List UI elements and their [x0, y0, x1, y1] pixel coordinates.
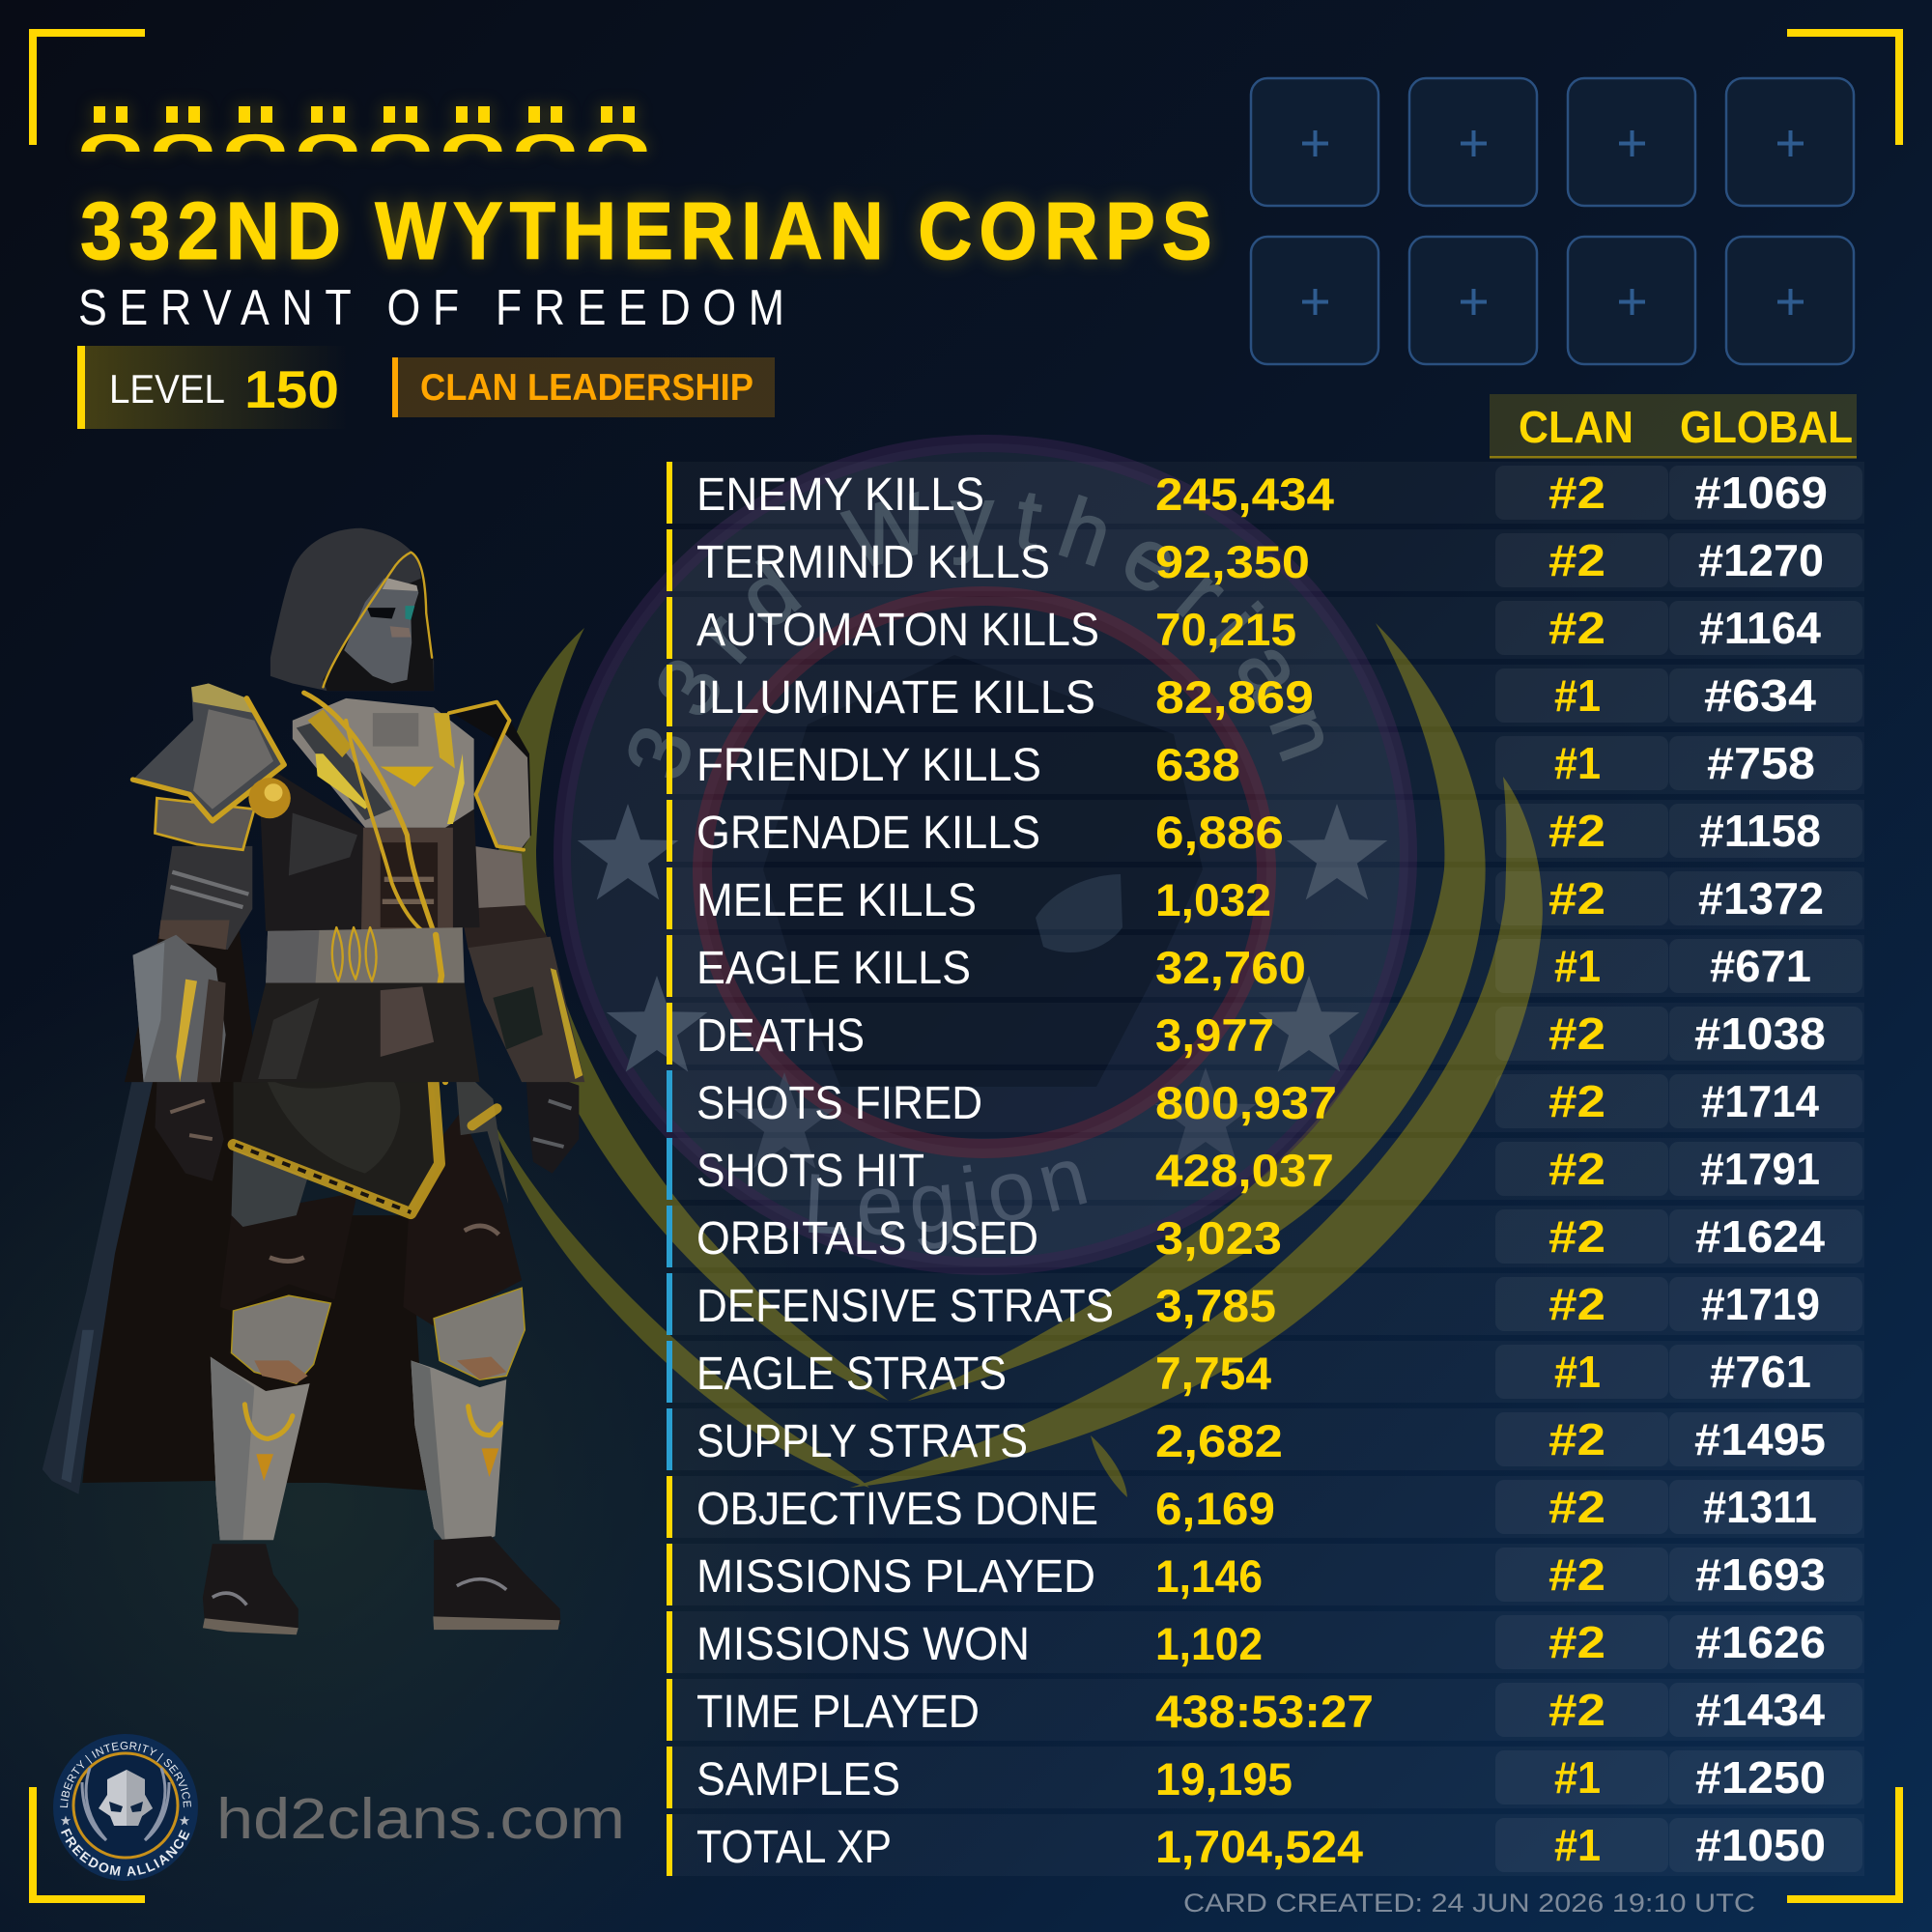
cape	[82, 1063, 426, 1491]
right forearm armor	[469, 937, 584, 1082]
row: defensive strats: 3,785	[1155, 1280, 1276, 1331]
row: missions played: #2	[1548, 1549, 1605, 1600]
right boot	[434, 1536, 560, 1624]
row: orbitals used	[667, 1206, 1864, 1267]
tabard gold trim	[234, 1063, 440, 1213]
row: shots fired: 800,937	[1155, 1077, 1337, 1128]
right thigh	[403, 1112, 522, 1326]
row: objectives done: OBJECTIVES DONE	[696, 1484, 1098, 1535]
chest plate	[293, 698, 474, 828]
row: samples: #1250	[1695, 1752, 1826, 1803]
emblem skull	[99, 1770, 153, 1826]
row: deaths	[667, 1003, 1864, 1065]
chest gold marks	[316, 753, 369, 810]
row: shots hit: #2	[1548, 1144, 1605, 1194]
row: shots hit	[667, 1138, 1864, 1200]
tabard upper	[241, 983, 480, 1082]
row: friendly kills: #1	[1554, 738, 1601, 788]
row: total xp: #1	[1554, 1820, 1601, 1870]
row: friendly kills: FRIENDLY KILLS	[696, 740, 1041, 791]
row: orbitals used: ORBITALS USED	[696, 1213, 1038, 1264]
face mask	[344, 578, 418, 684]
row: shots hit: #1791	[1700, 1144, 1820, 1194]
logo top arc text: 33rd Wytherian	[628, 491, 1323, 779]
row: melee kills: #1372	[1698, 873, 1824, 923]
gold orb	[248, 778, 291, 818]
gold rope	[304, 693, 440, 950]
row: deaths: #2	[1548, 1009, 1605, 1059]
row: friendly kills: #758	[1707, 738, 1815, 788]
row: missions won: #2	[1548, 1617, 1605, 1667]
left thigh	[220, 1192, 357, 1311]
row: supply strats: 2,682	[1155, 1415, 1283, 1466]
row: grenade kills: #1158	[1699, 806, 1821, 856]
row: enemy kills: #2	[1548, 468, 1605, 518]
row: shots fired	[667, 1070, 1864, 1132]
row: eagle strats	[667, 1341, 1864, 1403]
row: deaths: #1038	[1694, 1009, 1826, 1059]
belt	[266, 927, 465, 983]
figure upper body	[125, 528, 584, 1082]
role text: CLAN LEADERSHIP	[420, 367, 753, 409]
row: orbitals used: 3,023	[1155, 1212, 1282, 1264]
logo bottom arc text: Legion	[809, 1161, 1088, 1249]
row: eagle strats: #1	[1554, 1347, 1601, 1397]
row: supply strats	[667, 1408, 1864, 1470]
armored character figure	[43, 528, 584, 1634]
skull eye	[1036, 874, 1122, 952]
emblem bottom text: FREEDOM ALLIANCE	[61, 1828, 189, 1876]
row: deaths: 3,977	[1155, 1009, 1274, 1061]
row: missions played: 1,146	[1155, 1550, 1263, 1602]
row: eagle kills: #671	[1710, 941, 1811, 991]
row: samples: SAMPLES	[696, 1754, 900, 1805]
row: eagle kills: 32,760	[1155, 942, 1306, 993]
medal slots grid	[1251, 78, 1854, 364]
tabard lower	[234, 1063, 440, 1213]
row: melee kills: 1,032	[1155, 874, 1271, 925]
row: supply strats: #1495	[1694, 1414, 1826, 1464]
level badge	[77, 346, 348, 429]
row: missions played: MISSIONS PLAYED	[696, 1551, 1095, 1603]
row: terminid kills: #1270	[1698, 535, 1824, 585]
left boot	[203, 1544, 298, 1628]
left pauldron under plate	[155, 798, 254, 850]
row: friendly kills	[667, 732, 1864, 794]
level number: 150	[244, 359, 339, 419]
row: shots fired: #1714	[1701, 1076, 1819, 1126]
right knee guard	[434, 1288, 525, 1379]
stars	[578, 804, 1387, 1169]
emblem top text: LIBERTY | INTEGRITY | SERVICE	[60, 1742, 191, 1808]
row: defensive strats: #2	[1548, 1279, 1605, 1329]
corner bracket bottom-right	[1787, 1787, 1903, 1903]
left shin emblem	[244, 1405, 293, 1438]
row: automaton kills: #1164	[1699, 603, 1821, 653]
row: automaton kills: 70,215	[1155, 604, 1296, 655]
table header	[1490, 394, 1857, 458]
row: missions won: #1626	[1695, 1617, 1826, 1667]
left shin	[211, 1356, 310, 1540]
row: time played: TIME PLAYED	[696, 1687, 980, 1738]
row: melee kills: #2	[1548, 873, 1605, 923]
row: eagle kills: EAGLE KILLS	[696, 943, 971, 994]
card created timestamp: CARD CREATED: 24 JUN 2026 19:10 UTC	[1183, 1889, 1755, 1918]
row: objectives done: #1311	[1703, 1482, 1817, 1532]
hood	[270, 528, 434, 691]
row: defensive strats	[667, 1273, 1864, 1335]
logo disc with purple ring	[562, 443, 1408, 1266]
stats table	[667, 462, 1864, 1876]
left upper arm	[158, 846, 252, 950]
row: illuminate kills: #634	[1704, 670, 1816, 721]
row: eagle strats: 7,754	[1155, 1348, 1271, 1399]
global column heading: GLOBAL	[1680, 402, 1853, 452]
row: samples: #1	[1554, 1752, 1601, 1803]
row: melee kills: MELEE KILLS	[696, 875, 977, 926]
row: terminid kills: TERMINID KILLS	[696, 537, 1050, 588]
row: terminid kills: 92,350	[1155, 536, 1310, 587]
watermark clan logo	[497, 435, 1543, 1497]
subtitle: SERVANT OF FREEDOM	[78, 280, 784, 336]
row: enemy kills: #1069	[1694, 468, 1828, 518]
row: missions won: 1,102	[1155, 1618, 1263, 1669]
row: deaths: DEATHS	[696, 1010, 865, 1062]
row: shots hit: SHOTS HIT	[696, 1146, 924, 1197]
row: illuminate kills	[667, 665, 1864, 726]
level label: LEVEL	[109, 366, 225, 412]
row: defensive strats: #1719	[1701, 1279, 1820, 1329]
cape upper	[125, 927, 258, 1082]
row: time played	[667, 1679, 1864, 1741]
row: missions won: MISSIONS WON	[696, 1619, 1030, 1670]
row: total xp: TOTAL XP	[696, 1822, 892, 1873]
skull silhouette	[763, 655, 1203, 1087]
figure lower body	[43, 1063, 579, 1634]
row: shots fired: SHOTS FIRED	[696, 1078, 982, 1129]
row: grenade kills: #2	[1548, 806, 1605, 856]
clan tag row	[77, 100, 651, 158]
left forearm armor	[133, 935, 226, 1082]
row: objectives done: #2	[1548, 1482, 1605, 1532]
row: eagle strats: #761	[1710, 1347, 1811, 1397]
row: shots hit: 428,037	[1155, 1145, 1334, 1196]
right shin emblem	[469, 1406, 500, 1435]
row: shots fired: #2	[1548, 1076, 1605, 1126]
row: terminid kills	[667, 529, 1864, 591]
hood gold outline	[323, 553, 432, 687]
clan column heading: CLAN	[1519, 402, 1634, 452]
chest straps	[361, 828, 453, 931]
title: 332ND WYTHERIAN CORPS	[80, 186, 1212, 277]
row: missions won	[667, 1611, 1864, 1673]
row: illuminate kills: #1	[1554, 670, 1601, 721]
torso dark	[258, 761, 480, 931]
row: defensive strats: DEFENSIVE STRATS	[696, 1281, 1114, 1332]
row: time played: #1434	[1695, 1685, 1825, 1735]
row: supply strats: SUPPLY STRATS	[696, 1416, 1028, 1467]
row: melee kills	[667, 867, 1864, 929]
row: time played: #2	[1548, 1685, 1605, 1735]
right shin	[411, 1360, 506, 1551]
row: supply strats: #2	[1548, 1414, 1605, 1464]
right upper arm	[469, 846, 549, 946]
laurel crescents	[488, 623, 1543, 1497]
row: eagle strats: EAGLE STRATS	[696, 1349, 1007, 1400]
row: grenade kills: GRENADE KILLS	[696, 808, 1040, 859]
row: friendly kills: 638	[1155, 739, 1240, 790]
row: enemy kills: 245,434	[1155, 469, 1334, 520]
role badge	[392, 357, 775, 417]
row: illuminate kills: 82,869	[1155, 671, 1314, 723]
row: time played: 438:53:27	[1155, 1686, 1374, 1737]
row: enemy kills: ENEMY KILLS	[696, 469, 984, 521]
clan tag row: ÖÖÖÖÖÖÖÖ	[79, 125, 649, 180]
site name: hd2clans.com	[216, 1787, 625, 1851]
emblem laurel	[82, 1768, 169, 1840]
row: orbitals used: #1624	[1695, 1211, 1825, 1262]
row: illuminate kills: ILLUMINATE KILLS	[696, 672, 1095, 724]
left pauldron	[133, 684, 284, 821]
row: orbitals used: #2	[1548, 1211, 1605, 1262]
red ring	[702, 596, 1266, 1149]
row: automaton kills: #2	[1548, 603, 1605, 653]
row: total xp: 1,704,524	[1155, 1821, 1363, 1872]
row: missions played	[667, 1544, 1864, 1605]
corner bracket top-left	[29, 29, 145, 145]
row: samples	[667, 1747, 1864, 1808]
row: automaton kills	[667, 597, 1864, 659]
row: total xp: #1050	[1695, 1820, 1826, 1870]
row: objectives done: 6,169	[1155, 1483, 1275, 1534]
row: enemy kills	[667, 462, 1864, 524]
freedom alliance emblem	[53, 1734, 198, 1881]
row: missions played: #1693	[1695, 1549, 1826, 1600]
left knee guard	[232, 1295, 330, 1383]
row: eagle kills: #1	[1554, 941, 1601, 991]
row: samples: 19,195	[1155, 1753, 1293, 1804]
row: grenade kills	[667, 800, 1864, 862]
left hand	[155, 1070, 224, 1181]
row: automaton kills: AUTOMATON KILLS	[696, 605, 1099, 656]
row: objectives done	[667, 1476, 1864, 1538]
right pauldron	[449, 702, 531, 850]
corner bracket top-right	[1787, 29, 1903, 145]
corner bracket bottom-left	[29, 1787, 145, 1903]
row: eagle kills	[667, 935, 1864, 997]
right hand	[526, 1066, 579, 1174]
emblem stars	[61, 1816, 189, 1825]
row: total xp	[667, 1814, 1864, 1876]
row: grenade kills: 6,886	[1155, 807, 1284, 858]
row: terminid kills: #2	[1548, 535, 1605, 585]
